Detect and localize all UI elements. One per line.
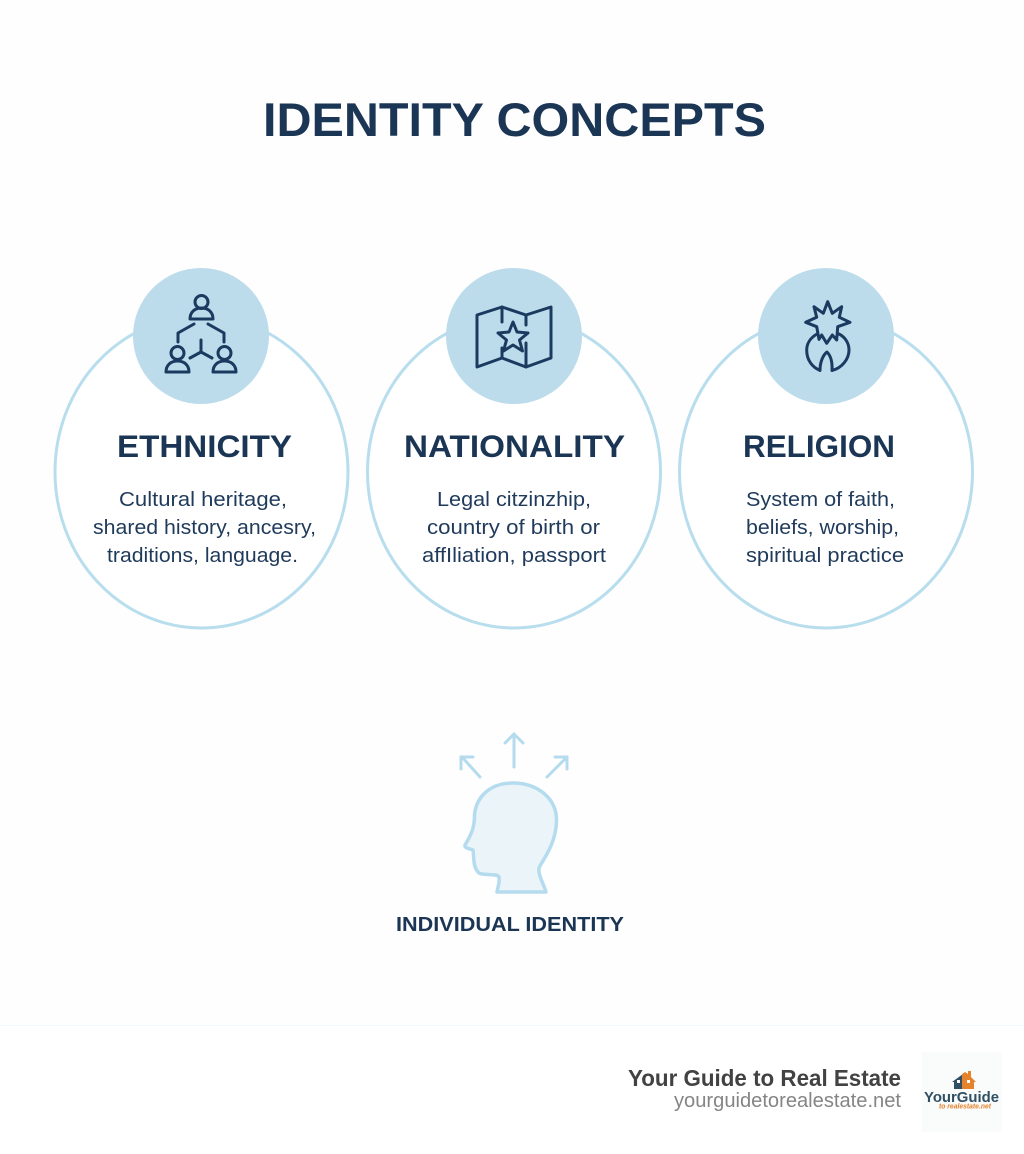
religion description: beliefs, worship, — [746, 516, 899, 539]
footer brand name: Your Guide to Real Estate — [628, 1065, 901, 1091]
ethnicity description: traditions, language. — [107, 544, 298, 567]
ethnicity description — [93, 488, 316, 567]
ethnicity description: Cultural heritage, — [119, 488, 287, 511]
panel: religion — [680, 268, 972, 628]
ethnicity ring — [55, 316, 348, 628]
icon: head silhouette — [465, 783, 556, 892]
icon: people network — [166, 296, 236, 372]
ethnicity heading: ETHNICITY — [117, 428, 292, 464]
icon: map with star — [477, 307, 551, 367]
panel: nationality — [368, 268, 660, 628]
nationality description: country of birth or — [427, 516, 600, 539]
religion heading: RELIGION — [743, 428, 895, 464]
footer url: yourguidetorealestate.net — [674, 1090, 901, 1112]
nationality icon badge — [446, 268, 582, 404]
religion description: spiritual practice — [746, 544, 904, 567]
panel: ethnicity — [55, 268, 348, 628]
title: IDENTITY CONCEPTS — [263, 94, 766, 147]
logo — [922, 1052, 1002, 1132]
religion description — [746, 488, 904, 567]
ethnicity icon badge — [133, 268, 269, 404]
nationality description: Legal citzinzhip, — [437, 488, 591, 511]
logo: to realestate.net — [939, 1102, 991, 1110]
footer — [0, 1025, 1024, 1154]
religion icon badge — [758, 268, 894, 404]
nationality description: affIliation, passport — [422, 544, 606, 567]
nationality heading: NATIONALITY — [404, 428, 625, 464]
nationality ring — [368, 316, 660, 628]
religion description: System of faith, — [746, 488, 895, 511]
icon: arrows radiating from head — [461, 734, 567, 777]
religion ring — [680, 316, 972, 628]
nationality description — [422, 488, 606, 567]
icon: star and flame — [806, 302, 850, 370]
logo: YourGuide — [924, 1089, 999, 1106]
individual identity label: INDIVIDUAL IDENTITY — [396, 914, 625, 936]
ethnicity description: shared history, ancesry, — [93, 516, 316, 539]
